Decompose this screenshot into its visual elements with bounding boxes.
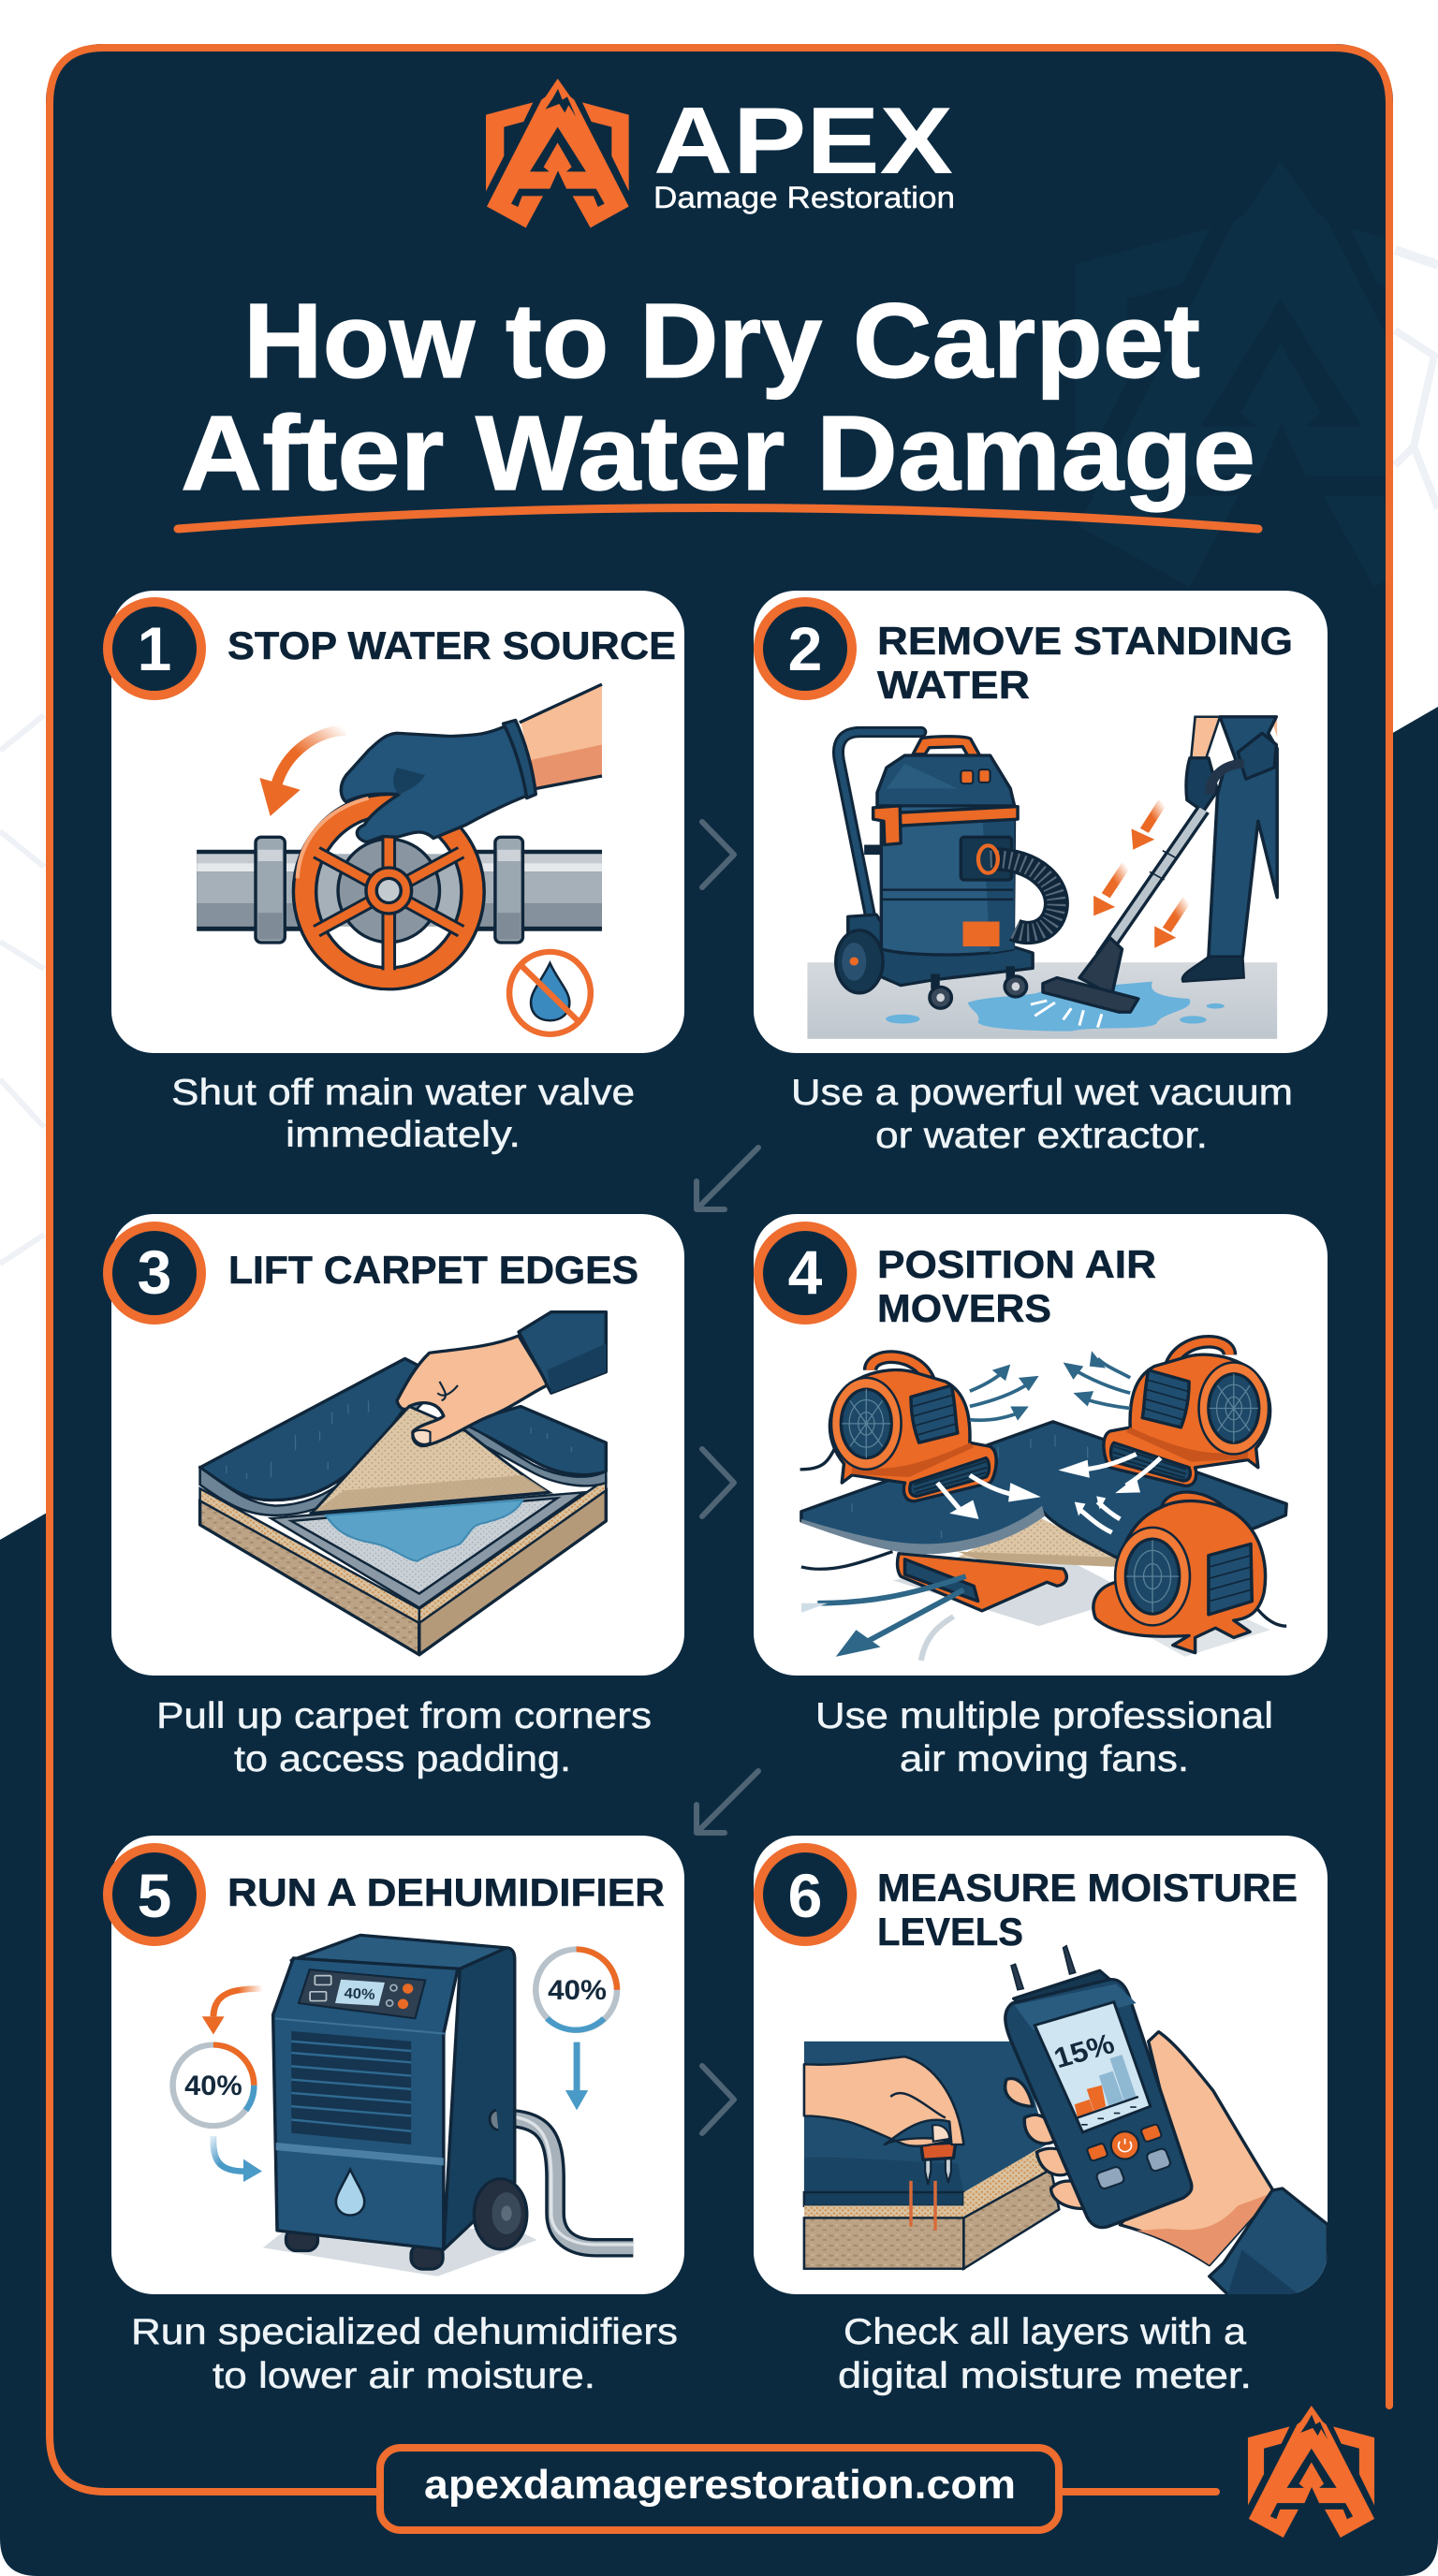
step number 2 xyxy=(758,602,852,695)
step 4 heading: POSITION AIR xyxy=(877,1242,1156,1286)
step 1 description: Shut off main water valve xyxy=(171,1073,635,1113)
logo wordmark: Damage Restoration xyxy=(653,181,955,214)
panel: step 4 position air movers xyxy=(754,1214,1328,1676)
step 6 description: digital moisture meter. xyxy=(838,2356,1252,2396)
panel: step 6 measure moisture levels xyxy=(754,1836,1328,2294)
flow arrow: step 1 to 2 xyxy=(702,822,734,887)
humidity gauge right xyxy=(536,1949,617,2030)
step 1 description: immediately. xyxy=(286,1115,521,1155)
step 4 heading: MOVERS xyxy=(877,1286,1051,1330)
flow arrow: step 3 to 4 xyxy=(702,1449,734,1516)
step 2 description xyxy=(791,1073,1293,1156)
icon: no water xyxy=(509,952,591,1034)
title: How to Dry Carpet xyxy=(243,282,1200,400)
step 5 description: to lower air moisture. xyxy=(213,2356,595,2396)
step 2 heading: REMOVE STANDING xyxy=(877,619,1293,663)
humidity gauge left: 40% xyxy=(184,2071,242,2101)
illustration: dehumidifier with drain hose: 40% xyxy=(344,1986,375,2003)
step number 5 xyxy=(108,1848,201,1941)
illustration: dehumidifier with drain hose xyxy=(202,1935,633,2276)
step number 1: 1 xyxy=(138,614,171,683)
website pill: apexdamagerestoration.com xyxy=(424,2462,1016,2508)
step 5 heading: RUN A DEHUMIDIFIER xyxy=(227,1870,665,1914)
illustration: moisture meter on carpet xyxy=(804,1946,1328,2294)
step 2 description: Use a powerful wet vacuum xyxy=(791,1073,1293,1113)
step number 6: 6 xyxy=(788,1861,822,1930)
title xyxy=(181,282,1255,512)
step 1 description xyxy=(171,1073,635,1155)
step number 4 xyxy=(758,1226,852,1320)
step number 1 xyxy=(108,602,201,695)
step 6 description xyxy=(838,2312,1252,2396)
step 6 heading: LEVELS xyxy=(877,1910,1023,1954)
humidity gauge right: 40% xyxy=(548,1976,607,2006)
step 2 heading xyxy=(877,619,1293,707)
dark panel with watermark xyxy=(46,44,1393,1509)
humidity gauge left xyxy=(173,2045,254,2126)
step 3 description xyxy=(156,1696,652,1779)
flow arrow: step 2 to 3 xyxy=(697,1148,758,1209)
logo wordmark: APEX xyxy=(653,89,953,194)
step 3 description: to access padding. xyxy=(234,1739,571,1779)
step 6 heading: MEASURE MOISTURE xyxy=(877,1866,1298,1910)
panel: step 5 run a dehumidifier xyxy=(108,1836,684,2294)
panel: step 2 remove standing water xyxy=(754,591,1328,1053)
flow arrow: step 4 to 5 xyxy=(697,1771,758,1833)
step 2 description: or water extractor. xyxy=(875,1116,1208,1156)
website pill xyxy=(380,2448,1059,2530)
title underline xyxy=(178,507,1258,529)
illustration: three air movers drying carpet xyxy=(800,1341,1286,1661)
step number 6 xyxy=(758,1848,852,1941)
step 2 heading: WATER xyxy=(877,663,1030,707)
step number 5: 5 xyxy=(138,1861,171,1930)
illustration: wet vacuum and worker xyxy=(807,717,1277,1039)
step 6 description: Check all layers with a xyxy=(844,2312,1246,2352)
step 4 description xyxy=(815,1696,1273,1779)
step 5 description xyxy=(131,2312,678,2396)
step 4 description: Use multiple professional xyxy=(815,1696,1273,1736)
illustration: moisture meter on carpet: 15% xyxy=(1050,2027,1118,2074)
step 4 heading xyxy=(877,1242,1156,1330)
panel: step 1 stop water source xyxy=(108,591,684,1053)
title: After Water Damage xyxy=(181,394,1255,512)
step number 3 xyxy=(108,1226,201,1320)
illustration: carpet corner lifted by hand xyxy=(200,1312,606,1655)
step number 2: 2 xyxy=(788,614,822,683)
step 3 description: Pull up carpet from corners xyxy=(156,1696,652,1736)
step 3 heading: LIFT CARPET EDGES xyxy=(228,1248,638,1292)
step 1 heading: STOP WATER SOURCE xyxy=(227,623,676,667)
panel: step 3 lift carpet edges xyxy=(108,1214,684,1676)
step number 3: 3 xyxy=(138,1237,171,1307)
step 6 heading xyxy=(877,1866,1298,1954)
footer logo xyxy=(1248,2406,1374,2538)
illustration: gloved hand closing valve xyxy=(197,684,602,979)
step number 4: 4 xyxy=(788,1237,823,1307)
step 4 description: air moving fans. xyxy=(900,1739,1189,1779)
logo: APEX mark xyxy=(486,79,629,227)
flow arrow: step 5 to 6 xyxy=(702,2066,734,2133)
step 5 description: Run specialized dehumidifiers xyxy=(131,2312,678,2352)
